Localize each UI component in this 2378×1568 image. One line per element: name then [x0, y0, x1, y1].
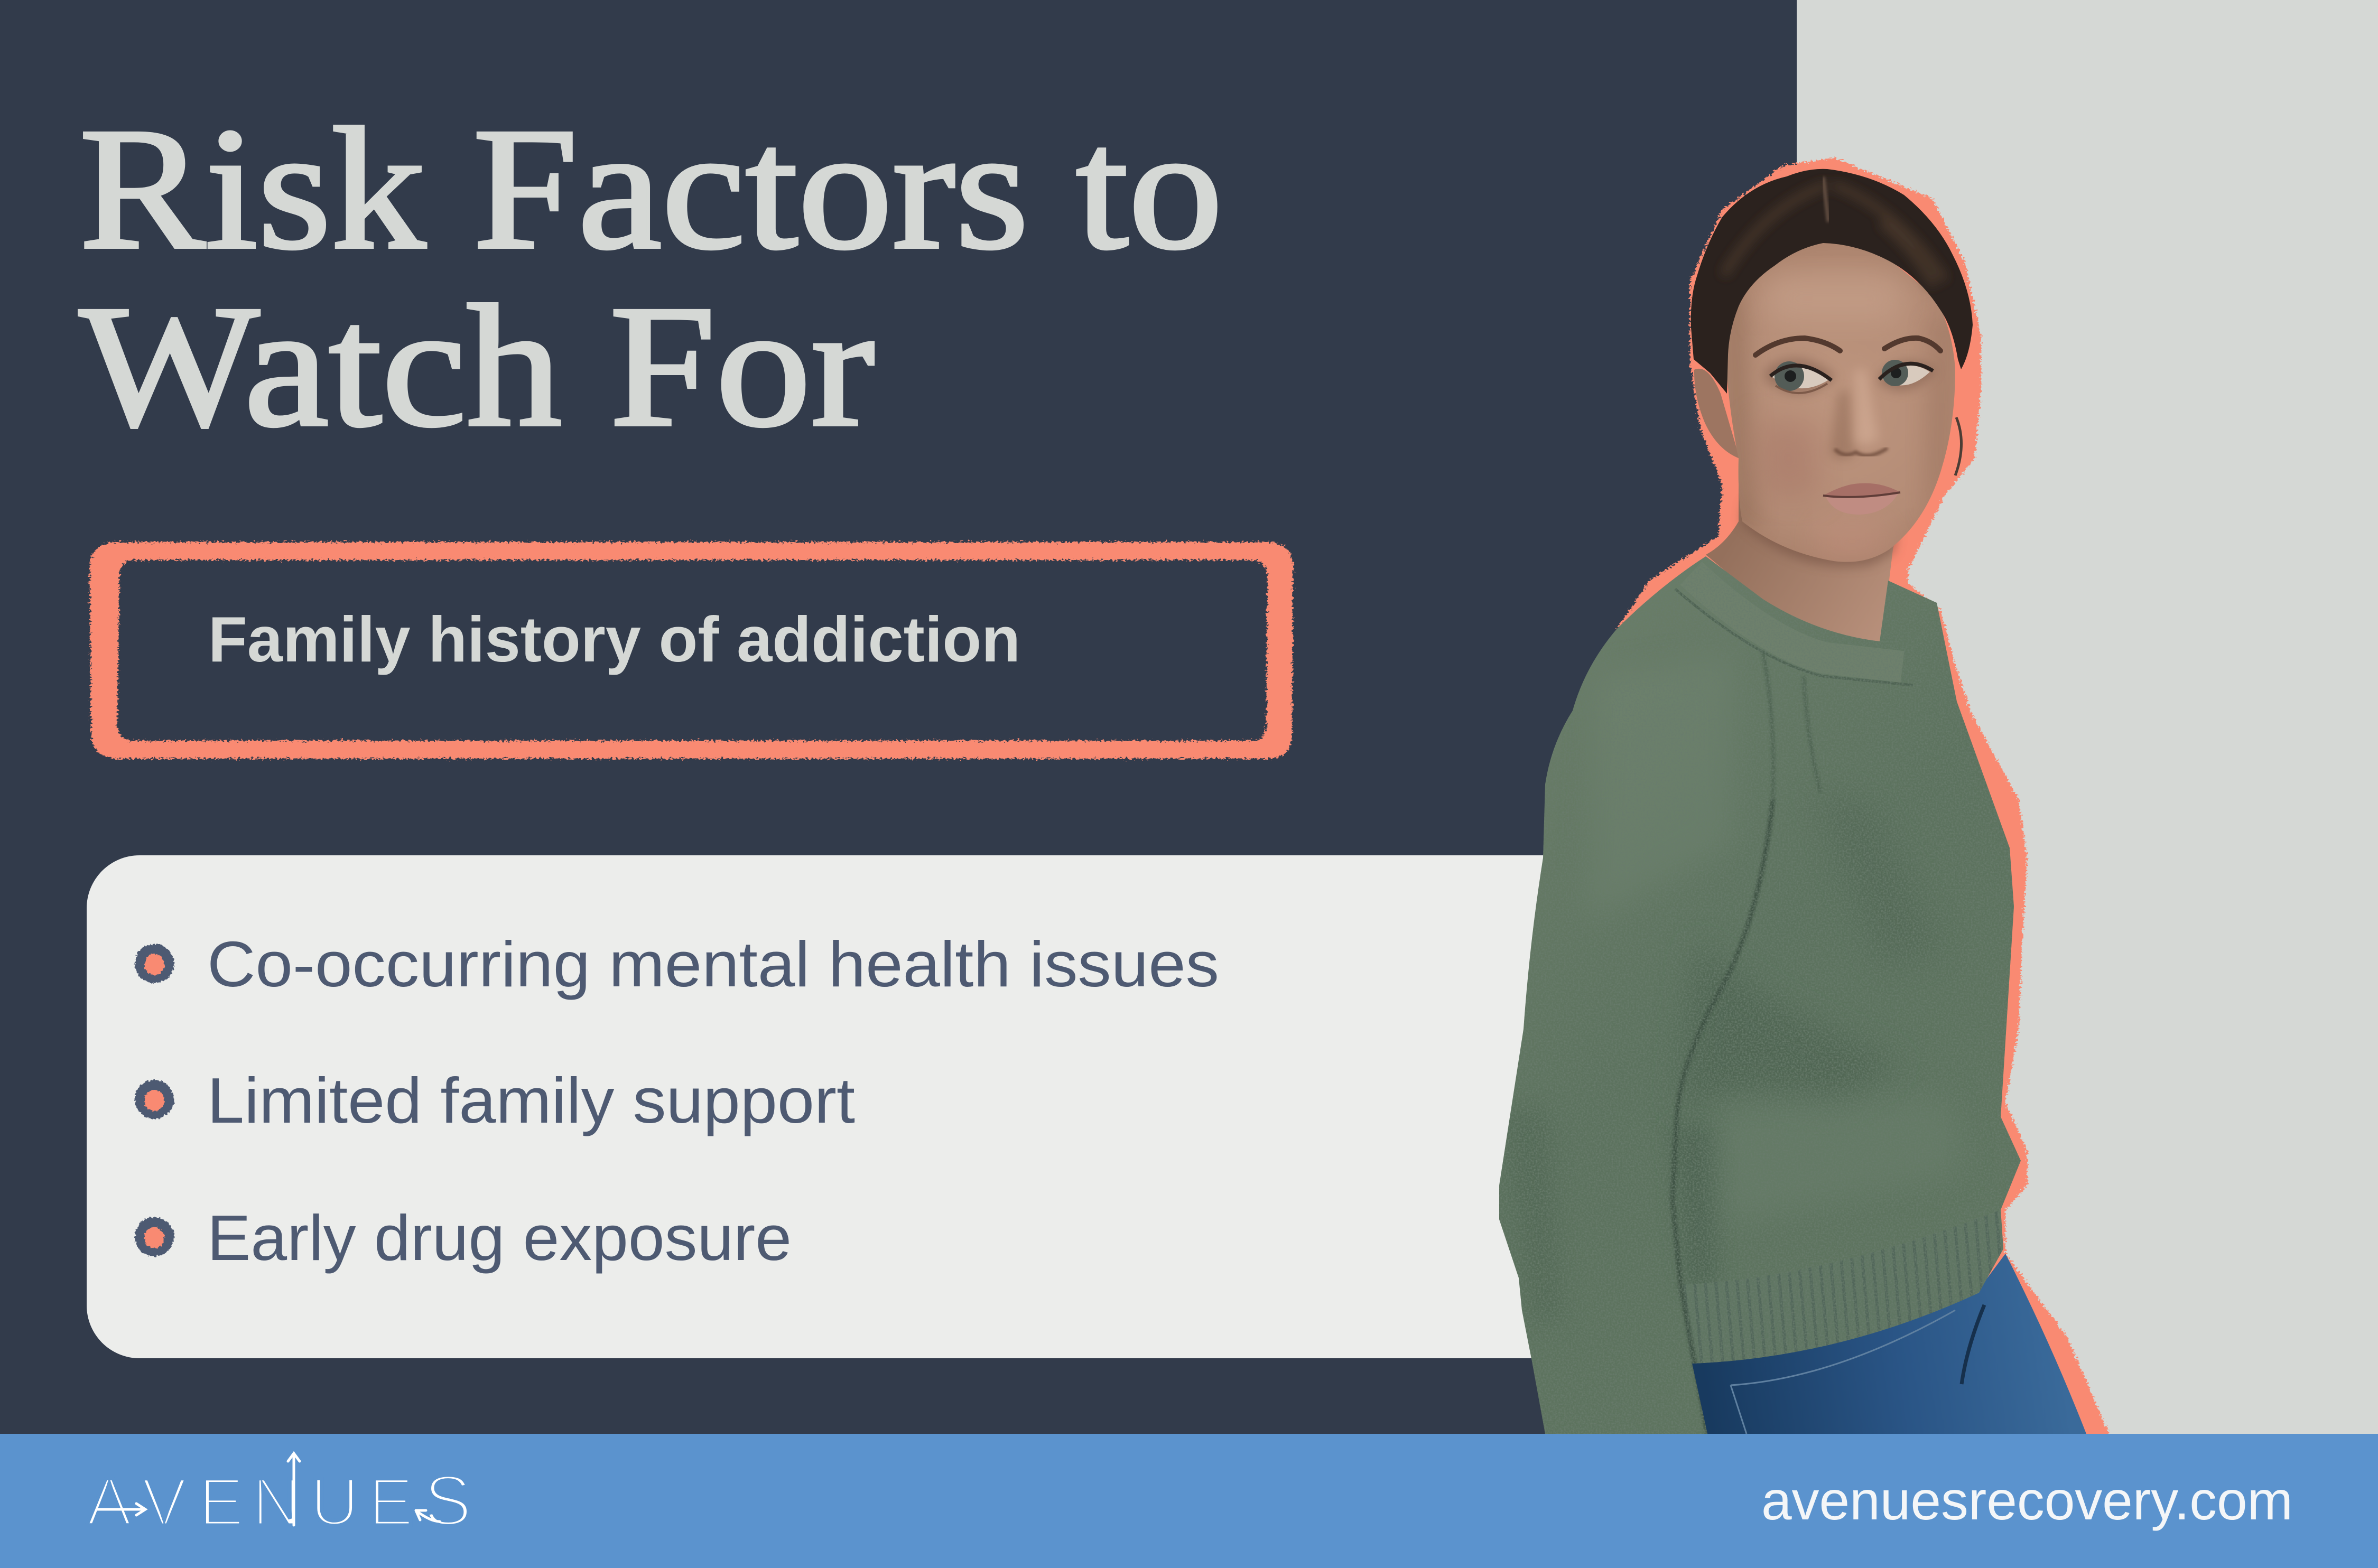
title: Watch For — [79, 270, 875, 463]
list item 1: Co-occurring mental health issues — [207, 928, 1219, 1000]
right eyebrow — [1884, 338, 1940, 351]
logo: Avenues — [87, 1453, 472, 1541]
sweater hem rib — [1679, 1210, 2003, 1364]
hair — [1691, 169, 1973, 475]
title: Risk Factors to — [79, 92, 1223, 285]
mouth — [1823, 483, 1900, 515]
background: navy panel — [0, 0, 1797, 1434]
list background — [87, 855, 1672, 1358]
left eye — [1765, 358, 1836, 394]
arm crease — [1673, 799, 1773, 1434]
list item 2: Limited family support — [207, 1065, 855, 1136]
person illustration — [1495, 158, 2111, 1437]
bullet 1 — [135, 944, 174, 983]
panel: risk factor list — [87, 855, 1672, 1358]
raglan seams — [1763, 651, 1820, 799]
jeans — [1686, 1254, 2086, 1434]
website url: avenuesrecovery.com — [1761, 1470, 2293, 1532]
neck shadow — [1741, 502, 1897, 567]
hand-drawn coral frame — [90, 542, 1293, 759]
logo arrow: right — [97, 1504, 145, 1515]
face — [1727, 243, 1955, 562]
right eye — [1879, 360, 1937, 391]
neck — [1706, 465, 1902, 646]
ear — [1694, 369, 1740, 459]
sweater shading — [1495, 555, 2024, 1437]
logo arrow: curved — [416, 1510, 440, 1522]
nose — [1829, 370, 1888, 460]
coral cut-out halo — [1617, 158, 2111, 1437]
highlighted risk factor box — [90, 542, 1293, 759]
collar — [1726, 603, 1904, 683]
list item 3: Early drug exposure — [207, 1202, 792, 1274]
footer bar — [0, 1434, 2378, 1568]
left eyebrow — [1755, 338, 1840, 355]
face shading — [1720, 296, 1760, 528]
knit texture — [1495, 555, 2024, 1437]
logo arrow: up — [288, 1453, 300, 1525]
bullet 3 — [135, 1217, 174, 1256]
bullet 2 — [135, 1080, 174, 1119]
background: light grey panel — [1797, 0, 2378, 1434]
sweater — [1495, 555, 2024, 1437]
logo wordmark: AVENUES — [87, 1460, 472, 1541]
title — [79, 92, 1223, 463]
risk factor label: Family history of addiction — [208, 603, 1020, 675]
